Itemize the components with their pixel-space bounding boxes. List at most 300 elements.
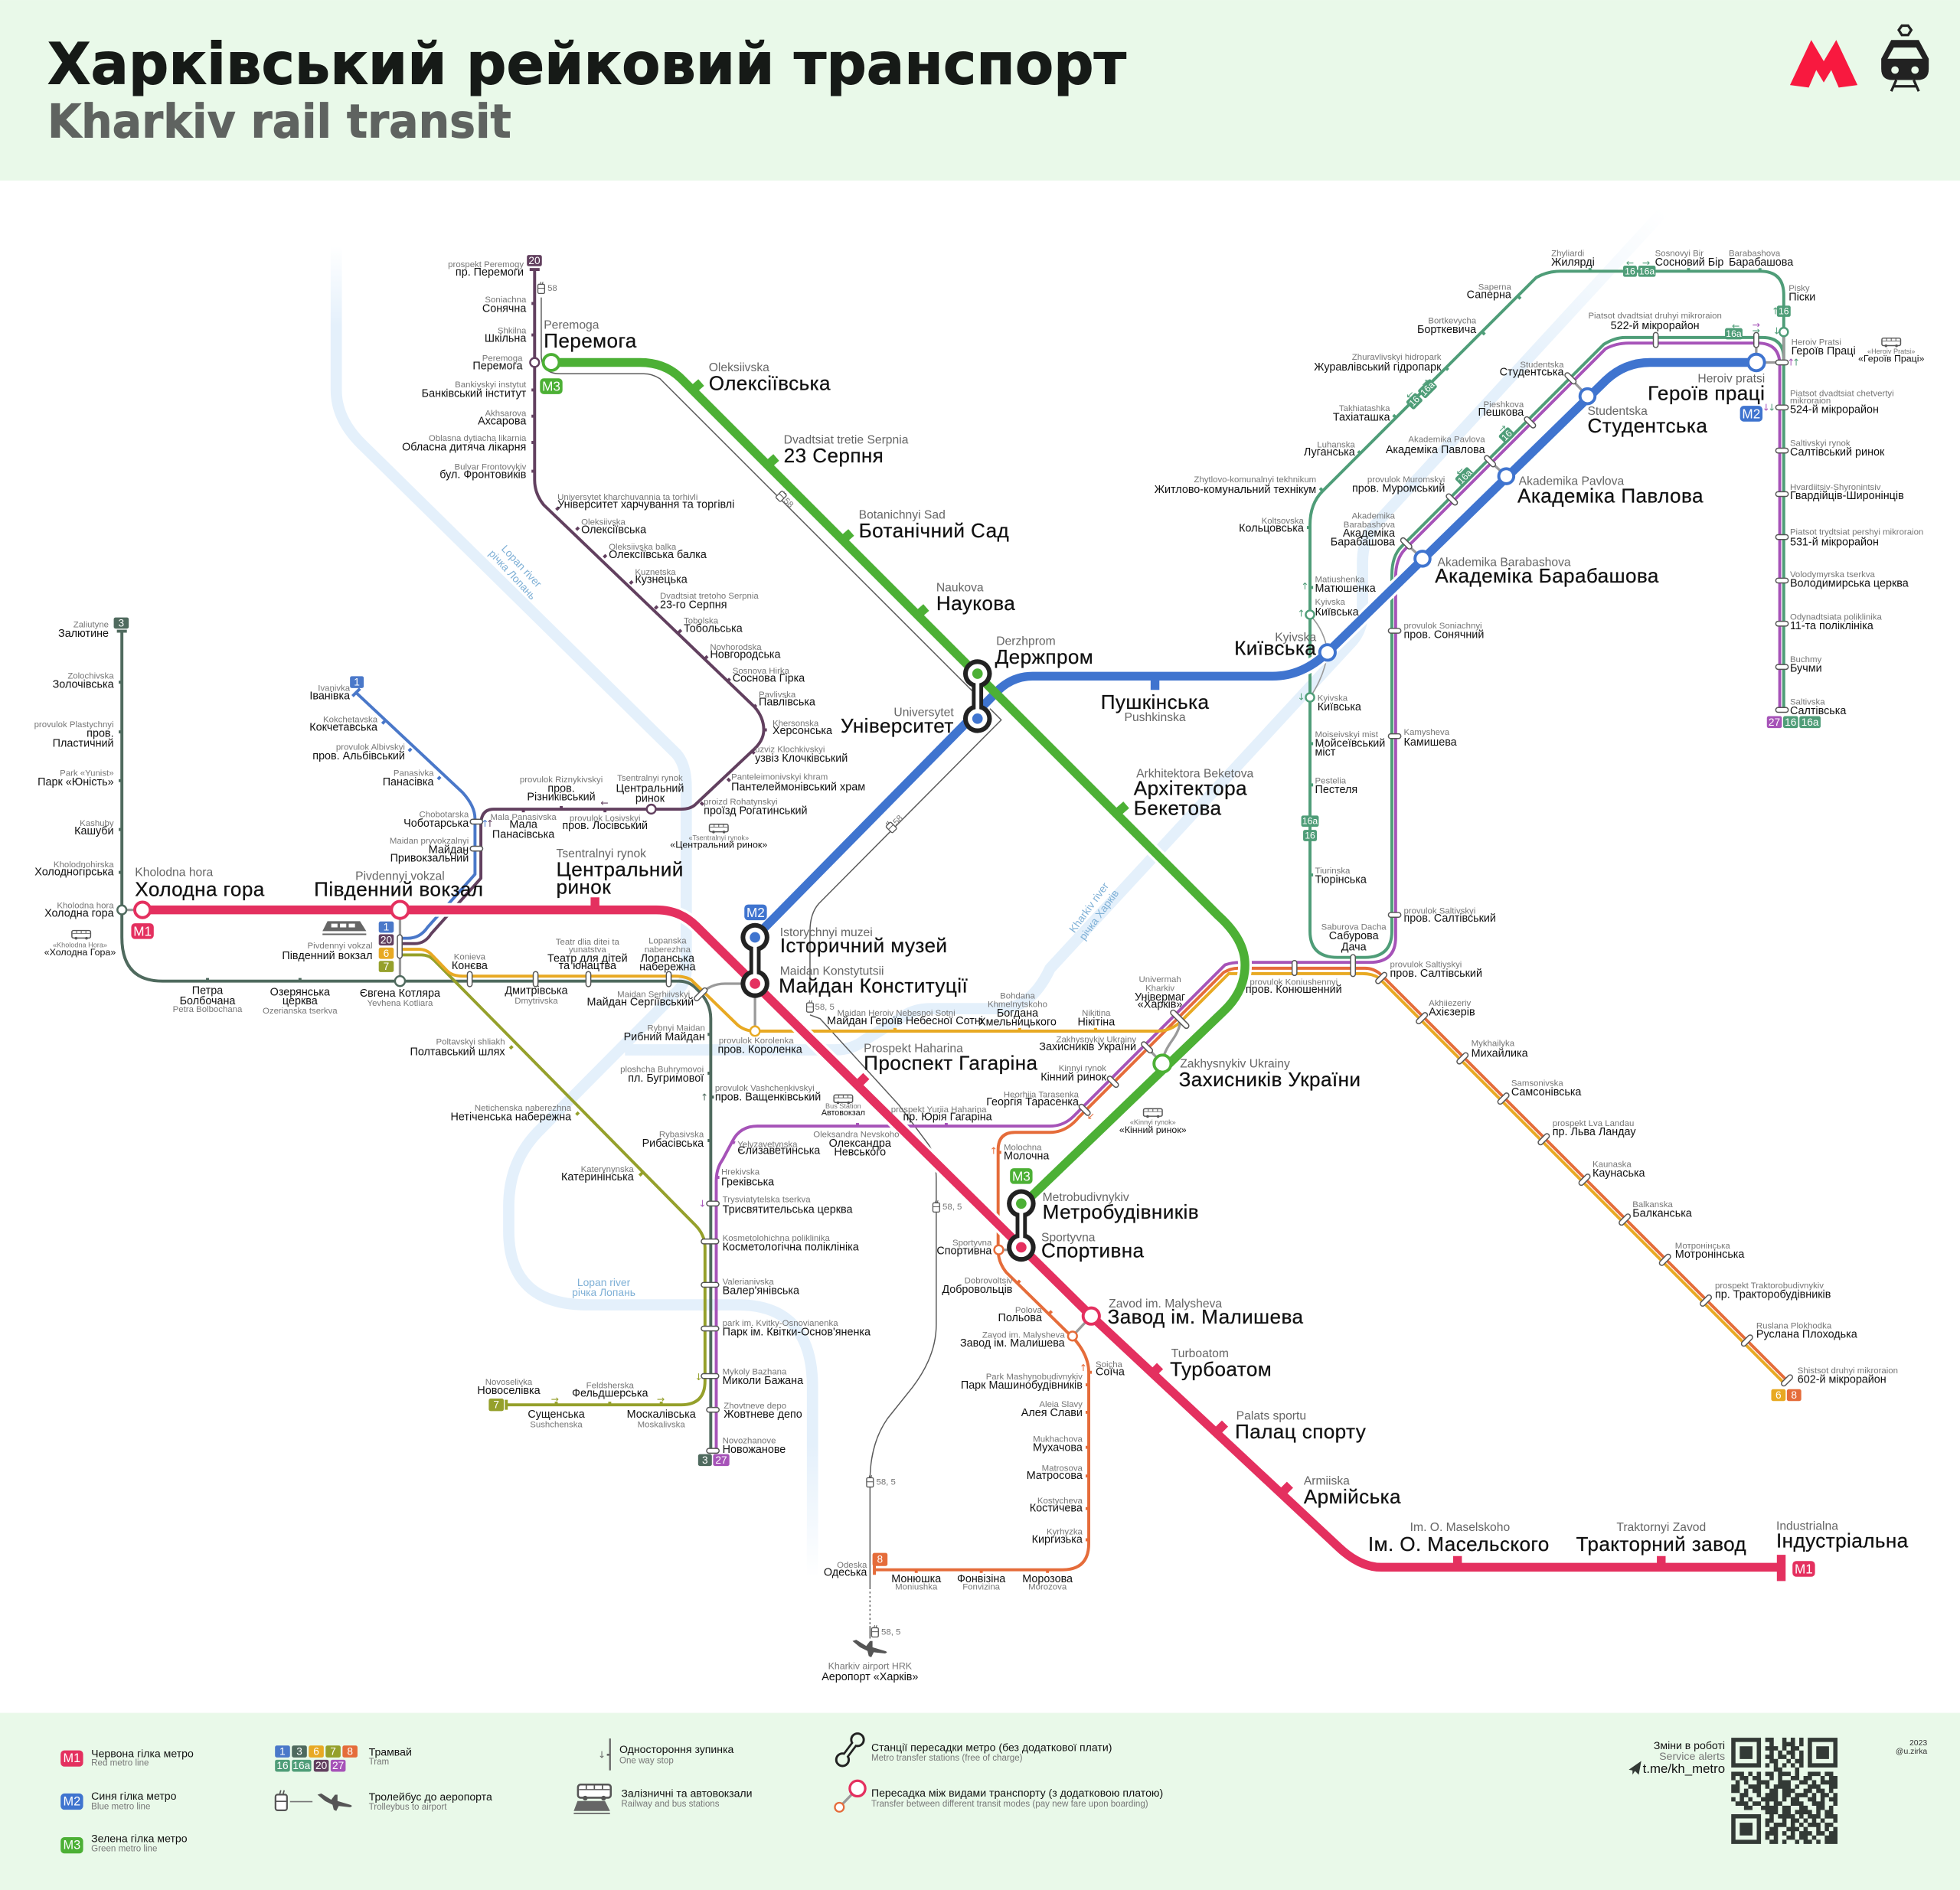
arrows: purple: ↑ xyxy=(1787,357,1795,368)
tram stop labels: east lines 6 and 8: Mykhailyka xyxy=(1472,1039,1515,1048)
icon: metro logo xyxy=(1790,40,1857,87)
metro line M3 green xyxy=(551,363,1245,1206)
legend: transit mode transfer: Пересадка між видами транспорту (з додатковою платою) xyxy=(871,1787,1163,1799)
tram stop labels: line 3: Євгена Котляра xyxy=(360,987,440,1000)
badge 8 south: 8 xyxy=(877,1554,884,1565)
tram stop labels: line 8 south xyxy=(824,1143,1125,1592)
tram stop labels: line 27 south: пр. Юрія Гагаріна xyxy=(903,1111,992,1124)
tram stop labels: line 1: Panasivka xyxy=(394,769,434,779)
station: Олексіївська xyxy=(709,361,831,394)
tram stop labels: line 16a and 27: Studentska xyxy=(1520,361,1564,370)
station: Олексіївська: Oleksiivska xyxy=(709,361,769,374)
tram stop labels: line 1: Ivanivka xyxy=(318,684,351,694)
legend: tram badges xyxy=(275,1745,412,1771)
arrows: west: ↓ xyxy=(695,1372,703,1382)
tram stop labels: line 3: Zolochivska xyxy=(67,671,114,681)
station: Університет: Universytet xyxy=(893,707,954,720)
tram stop labels: line 20: Пантелеймонівський храм xyxy=(731,782,865,794)
legend: tram badges: 20 xyxy=(315,1760,328,1771)
icon: trolleybus 58,5 xyxy=(807,1000,835,1012)
badge 3: 3 xyxy=(119,617,125,628)
tram stop labels: line 16: Жилярді xyxy=(1551,256,1595,269)
tram stop labels: east lines 6 and 8: пров. Салтівський xyxy=(1390,968,1482,980)
badges diagonal inner: 16 xyxy=(1499,428,1514,443)
tram stop labels: line 16a and 27: Pieshkova xyxy=(1484,400,1524,410)
tram stop labels: line 6: Nikitina xyxy=(1082,1009,1111,1018)
capsules: south vertical xyxy=(701,1201,719,1453)
arrows: green: ↑ xyxy=(1297,609,1305,619)
station: Академіка Барабашова: Академіка Барабашова xyxy=(1435,564,1659,587)
tram stop labels: line 3: Petra Bolbochana xyxy=(173,1005,243,1014)
tram stop labels: line 8 south: Molochna xyxy=(1004,1143,1042,1152)
tram stop labels: line 16a and 27: Barabashova xyxy=(1344,521,1396,530)
station: Холодна гора xyxy=(135,867,265,901)
station: Турбоатом: Турбоатом xyxy=(1170,1358,1272,1381)
tram stop labels: line 16a and 27: Piatsot trydtsiat pershyi mikroraion xyxy=(1790,528,1923,537)
QR code xyxy=(1731,1738,1838,1844)
tram stop labels: line 3: Залютине xyxy=(58,628,109,640)
tram stop labels: line 16: Матюшенка xyxy=(1315,583,1376,595)
tram stop labels: line 8 south: Aleia Slavy xyxy=(1039,1400,1083,1409)
arrows: green xyxy=(1297,258,1800,703)
tram stop labels: line 20: Сонячна xyxy=(482,302,526,315)
tram stop labels: line 16 xyxy=(1155,249,1815,954)
tram stop labels: line 3: provulok Vashchenkivskyi xyxy=(715,1084,815,1093)
station: Захисників України: Zakhysnykiv Ukrainy xyxy=(1180,1057,1290,1070)
tram stop labels: line 16: Тахіаташка xyxy=(1333,411,1390,423)
arrows: green: ↓ xyxy=(1773,326,1781,337)
tram stop labels: line 7: Новоселівка xyxy=(477,1385,541,1397)
legend: tram badges: 16a xyxy=(292,1760,311,1771)
tram stop labels: line 16a and 27: Гвардійців-Широнінців xyxy=(1790,490,1904,502)
tram stop labels: line 3: Kholodna hora xyxy=(57,902,114,911)
legend: railway and bus stations: Залізничні та автовокзали xyxy=(621,1787,753,1799)
tram stop labels: line 16: Саперна xyxy=(1467,289,1511,301)
tram stop labels: line 20: Соснова Гірка xyxy=(733,673,805,685)
tram stop labels: line 16a and 27: Heroiv Pratsi xyxy=(1792,338,1841,347)
tram stop labels: east lines 6 and 8: Shistsot druhyi mikroraion xyxy=(1798,1366,1898,1376)
arrows: west: ↑ xyxy=(486,818,494,829)
arrows: green: ← xyxy=(1732,321,1740,331)
metro lines xyxy=(142,363,1782,1581)
tram stop labels: line 20: Oblasna dytiacha likarnia xyxy=(429,434,527,443)
tram stop labels: line 7: Netichenska naberezhna xyxy=(475,1104,572,1113)
tram stop labels: line 16a and 27: provulok Saltivskyi xyxy=(1403,906,1475,916)
legend: M2: Синя гілка метро xyxy=(91,1790,177,1802)
tram stop labels: line 7: Нетіченська набережна xyxy=(451,1111,571,1124)
airport xyxy=(822,1640,918,1683)
tram stop labels: east lines 6 and 8: Михайлика xyxy=(1472,1047,1528,1059)
tram stop labels: line 8 south: Matrosova xyxy=(1042,1464,1083,1473)
badges 27 16 16a terminus: 27 xyxy=(1769,717,1780,728)
tram stop labels: line 7: Poltavskyi shliakh xyxy=(436,1038,505,1047)
tram stop labels: east lines 6 and 8: Samsonivska xyxy=(1511,1079,1563,1089)
bus station Автовокзал: Bus Station xyxy=(825,1102,861,1110)
tram stop labels: line 20: Bulvar Frontovykiv xyxy=(455,463,527,472)
tram stop labels: line 20: Олексіївська xyxy=(581,524,646,536)
metro line M2 blue xyxy=(755,363,1756,938)
tram stop labels: line 1: Pivdennyi vokzal xyxy=(308,942,373,951)
tram stop labels: line 8 south: Фонвізіна xyxy=(957,1573,1005,1585)
tram stop labels: line 27 south: Універмаг xyxy=(1135,991,1185,1004)
interchange connectors xyxy=(121,331,1784,1336)
tram stop labels: east lines 6 and 8: Ruslana Plokhodka xyxy=(1756,1321,1832,1330)
tram stop labels: line 20: Khersonska xyxy=(773,719,819,728)
tram stop labels: line 3: Yevhena Kotliara xyxy=(368,999,433,1008)
tram stop labels: east lines 6 and 8: Balkanska xyxy=(1632,1200,1674,1209)
station: Ботанічний Сад: Botanichnyi Sad xyxy=(859,509,946,522)
tram stop labels: line 27 south: Zakhysnykiv Ukrainy xyxy=(1056,1035,1136,1044)
tram stop labels: line 8 south: Киргизька xyxy=(1032,1533,1083,1546)
transfer: M1 xyxy=(135,902,1099,1324)
station: Армійська xyxy=(1304,1475,1401,1508)
tram stop labels: line 3: Петра xyxy=(192,985,223,997)
tram stop labels: line 7: Katerynynska xyxy=(581,1165,634,1174)
badge 8 south xyxy=(873,1553,887,1566)
tram stop labels: line 16: Saburova Dacha xyxy=(1321,922,1387,932)
tram stop labels: line 16a and 27: provulok Soniachnyi xyxy=(1403,622,1482,631)
tram stop labels: line 27 south: Миколи Бажана xyxy=(723,1375,803,1387)
tram stop labels: line 16a and 27: Салтівський ринок xyxy=(1790,446,1885,459)
tram stop labels: line 3: Kholodnohirska xyxy=(54,860,114,870)
tram line 8 xyxy=(874,968,1788,1575)
tram stop labels: line 6: Конєва xyxy=(452,960,488,972)
bus station Кінний ринок: «Кінний ринок» xyxy=(1119,1125,1187,1135)
icon: trolleybus 58,5 airport: 58, 5 xyxy=(881,1627,900,1637)
station: Пушкінська: Pushkinska xyxy=(1125,711,1186,724)
badges 6 and 8 east xyxy=(1771,1389,1802,1401)
station: Олексіївська: Олексіївська xyxy=(709,371,831,394)
icon: trolleybus 58,5 airport xyxy=(871,1625,900,1637)
station: Академіка Павлова: Akademika Pavlova xyxy=(1519,475,1624,488)
tram stop labels: line 20: узвіз Клочківський xyxy=(755,752,848,765)
bus station Героїв Праці xyxy=(1858,338,1924,364)
airport label xyxy=(822,1660,918,1683)
tram stop labels: line 16a and 27: Akademika Pavlova xyxy=(1408,436,1485,445)
tram stop labels: line 16a and 27: Пешкова xyxy=(1478,406,1524,419)
station: Архітектора Бекетова: Архітектора xyxy=(1134,776,1247,799)
tram stop labels: line 27 south: Єлизаветинська xyxy=(737,1145,820,1157)
badge M1 east: M1 xyxy=(1795,1562,1813,1577)
tram stop labels: line 20: Олексіївська балка xyxy=(609,549,707,561)
tram stop labels: line 8 south: Одеська xyxy=(824,1567,867,1579)
bus station Центральний ринок: «Tsentralnyi rynok» xyxy=(688,834,749,842)
tram line 3 xyxy=(117,632,714,1450)
icon: trolleybus 58 north xyxy=(538,282,557,293)
credits: @u.zirka xyxy=(1896,1748,1927,1756)
tram line 7 xyxy=(403,955,705,1410)
tram line 1 xyxy=(352,689,475,938)
badges 16 16a top: 16a xyxy=(1639,266,1655,276)
legend: trolleybus to airport: Trolleybus to airport xyxy=(369,1803,447,1812)
tram stop labels: east lines 6 and 8: пров. Конюшенний xyxy=(1246,984,1342,996)
arrows: orange: ↑ xyxy=(990,1146,998,1157)
legend: tram badges: 27 xyxy=(332,1760,344,1771)
tram stop labels: line 1: Kokchetavska xyxy=(323,715,378,724)
capsules: right column xyxy=(1654,332,1788,712)
tram stop labels: line 16: Moiseivskyi mist xyxy=(1315,730,1379,739)
station: Київська: Kyivska xyxy=(1275,632,1316,645)
tram stop labels: line 16: Пестеля xyxy=(1315,784,1357,796)
tram stop labels: line 27 south: park im. Kvitky-Osnovianenka xyxy=(723,1319,838,1328)
legend: M1: Червона гілка метро xyxy=(91,1748,194,1760)
station: Центральний ринок: Tsentralnyi rynok xyxy=(557,847,646,860)
arrows: green: ↓ xyxy=(1768,402,1775,413)
tram stop labels: line 16: Kyivska xyxy=(1318,694,1348,703)
tram stop labels: east lines 6 and 8: Каунаська xyxy=(1592,1167,1645,1180)
tram stop labels: line 7: Moskalivska xyxy=(638,1420,685,1429)
arrows: green: ↙ xyxy=(1406,389,1414,400)
tram stop labels: line 7: Полтавський шлях xyxy=(410,1046,505,1059)
tram stop labels: line 8 south: Алея Слави xyxy=(1021,1407,1083,1419)
tram stop labels: line 16: Луганська xyxy=(1304,446,1355,459)
tram stop labels: line 27 south: Валер'янівська xyxy=(723,1285,799,1298)
tram stop labels: line 1: Південний вокзал xyxy=(282,950,373,962)
tram stop labels: line 6: Лопанська xyxy=(641,952,694,965)
tram stop labels: line 16: Barabashova xyxy=(1729,249,1781,258)
tram stop labels: line 16a and 27: 522-й мікрорайон xyxy=(1611,320,1700,332)
bus and railway stations xyxy=(44,338,1924,1135)
interchange: Kyivska arcs xyxy=(1310,615,1328,697)
tram stop labels: line 20: Кузнецька xyxy=(635,574,688,586)
bus station Героїв Праці: «Героїв Праці» xyxy=(1858,354,1924,364)
tram stop labels: line 3 xyxy=(34,620,821,1150)
capsules: east diagonal xyxy=(1375,971,1794,1387)
tram stop labels: line 20: Dvadtsiat tretoho Serpnia xyxy=(660,592,759,601)
tram stop labels: line 16: Saperna xyxy=(1478,283,1512,292)
station: Студентська: Студентська xyxy=(1587,414,1707,437)
tram stop labels: line 1: Chobotarska xyxy=(420,811,469,820)
tram stop labels: line 27 south: Жовтневе депо xyxy=(724,1409,802,1421)
service alerts: Service alerts xyxy=(1659,1751,1725,1763)
tram stop labels: line 16a and 27: пров. Салтівський xyxy=(1403,912,1496,925)
legend: one way stop: ↓ xyxy=(598,1749,606,1760)
icon: trolleybus 58 north: 58 xyxy=(547,284,557,293)
tram stop labels: line 1: пров. Альбівський xyxy=(312,750,405,762)
tram stop labels: line 20: проїзд Рогатинський xyxy=(704,805,808,818)
tram stop labels: line 16a and 27: Бучми xyxy=(1790,663,1822,675)
tram stop labels: line 3: Озерянська xyxy=(270,986,330,998)
tram line 20 xyxy=(400,269,767,944)
tram stop labels: line 16a and 27: Odynadtsiata poliklinika xyxy=(1790,613,1882,622)
legend: M3 xyxy=(60,1833,188,1854)
tram stop labels: line 20: Tobolska xyxy=(684,616,719,625)
station: Наукова xyxy=(936,581,1015,615)
tram stop labels: line 16a and 27: Камишева xyxy=(1403,736,1457,749)
tram stop labels: line 16a and 27: Академіка xyxy=(1343,527,1395,540)
station: Завод ім. Малишева: Завод ім. Малишева xyxy=(1108,1305,1303,1328)
bus station Кінний ринок: «Kinnyi rynok» xyxy=(1130,1118,1176,1126)
tram stop labels: line 20: Universytet kharchuvannia ta torhivli xyxy=(557,493,697,502)
tram stop labels: line 3: Park «Yunist» xyxy=(60,769,114,779)
station: Держпром: Derzhprom xyxy=(996,635,1056,648)
tram stop labels: line 3: Дмитрівська xyxy=(505,985,567,997)
legend: tram badges: 8 xyxy=(347,1746,353,1758)
tram stop labels: line 20: Oleksiivska xyxy=(581,517,626,527)
badges diagonal inner: 16a xyxy=(1455,468,1475,486)
tram stop labels: line 27 south: Захисників України xyxy=(1039,1041,1136,1053)
tram stop labels: line 8 south: Монюшка xyxy=(891,1573,941,1585)
tram stop labels: line 20: Університет харчування та торгівлі xyxy=(557,499,734,511)
tram stop labels: line 6: Театр для дітей xyxy=(547,952,628,965)
title: Харківський рейковий транспорт xyxy=(47,30,1126,97)
tram stop labels: east lines 6 and 8: provulok Saltiyskyi xyxy=(1390,960,1462,969)
badges 16 16a top: 16 xyxy=(1625,266,1635,276)
river label: Lopan upper: Lopan river xyxy=(499,543,544,590)
tram stop labels: line 7: Катеринінська xyxy=(561,1171,634,1183)
river label: Lopan upper: річка Лопань xyxy=(486,547,539,602)
tram stop labels: east lines 6 and 8: prospekt Lva Landau xyxy=(1553,1119,1634,1128)
tram stop labels: line 6: Хмельницького xyxy=(978,1017,1057,1029)
tram stop labels: line 3: церква xyxy=(283,995,318,1007)
tram stop labels: line 20: Tsentralnyi rynok xyxy=(617,774,683,783)
arrows: orange xyxy=(990,1111,1095,1373)
tram stop labels: east lines 6 and 8: provulok Koniushennyi xyxy=(1250,978,1338,987)
legend: M3: Green metro line xyxy=(91,1845,157,1854)
icon: trolleybus 58,5 south: 58, 5 xyxy=(876,1477,896,1487)
badge M3 south: M3 xyxy=(1012,1168,1031,1183)
arrows: west: ← xyxy=(600,798,609,808)
tram stop labels: line 8 south: Park Mashynobudivnykiv xyxy=(986,1373,1083,1382)
tram lines xyxy=(117,268,1788,1575)
station: Центральний ринок xyxy=(557,847,684,898)
tram stop labels: line 3: Болбочана xyxy=(180,995,235,1007)
legend: M2 xyxy=(60,1790,177,1811)
tram stop labels: line 7: Feldsherska xyxy=(586,1382,634,1391)
badge 20 north: 20 xyxy=(528,255,541,266)
tram stop labels: line 20: Kuznetska xyxy=(635,568,676,577)
tram stop labels: line 6: пров. Короленка xyxy=(718,1043,802,1056)
icon: trolleybus 58 south-west: 58 xyxy=(891,814,905,827)
station: Спортивна: Спортивна xyxy=(1041,1239,1145,1262)
tram stop labels: line 6: та юнацтва xyxy=(559,960,616,972)
metro line badges xyxy=(131,378,1815,1577)
tram stop labels: line 20: Mala Panasivska xyxy=(490,813,557,822)
tram stop labels: line 20: Мала xyxy=(509,819,537,831)
arrows: west: → xyxy=(657,1394,665,1405)
metro line M1 red xyxy=(142,897,1782,1581)
arrows: green: → xyxy=(1642,258,1650,269)
tram line 27 xyxy=(717,343,1780,1450)
rivers xyxy=(336,213,1662,1575)
arrows: west: ↑ xyxy=(481,818,489,829)
tram stop labels: line 6 xyxy=(452,936,1115,1056)
station: Пушкінська: Пушкінська xyxy=(1101,690,1209,713)
tram stop labels: line 20: Pavlivska xyxy=(759,690,796,700)
station: Перемога: Перемога xyxy=(544,329,637,352)
tram stop labels: line 16: Pestelia xyxy=(1315,776,1347,785)
station: Холодна гора: Холодна гора xyxy=(135,878,265,901)
station: Метробудівників: Metrobudivnykiv xyxy=(1043,1191,1129,1204)
tram stop labels: line 20: Тобольська xyxy=(684,622,743,635)
tram stop labels: line 27 south: Греківська xyxy=(721,1177,774,1189)
tram stop labels: line 20: 23-го Серпня xyxy=(660,599,727,611)
station: Держпром xyxy=(995,635,1093,668)
tram stop labels: line 6: Khmelnytskoho xyxy=(988,1000,1047,1010)
bus station Автовокзал: Автовокзал xyxy=(822,1108,865,1118)
bus station Героїв Праці: «Heroiv Pratsi» xyxy=(1867,348,1915,355)
legend: M2: M2 xyxy=(64,1795,80,1809)
tram stop labels: line 16a and 27: Volodymyrska tserkva xyxy=(1790,570,1876,579)
capsules: middle verticals xyxy=(1292,628,1401,977)
station: Ім. О. Масельского: Im. O. Maselskoho xyxy=(1410,1521,1510,1534)
tram stop labels: line 20: prospekt Peremogy xyxy=(448,260,524,269)
badges 16a 16 west: 16a xyxy=(1302,816,1318,827)
station: Майдан Конституції: Майдан Конституції xyxy=(779,974,968,997)
badges at Південний вокзал xyxy=(379,922,394,972)
legend: M3: M3 xyxy=(64,1839,80,1852)
badge M3 north: M3 xyxy=(542,379,560,394)
arrows: green: ↑ xyxy=(1301,581,1309,592)
station: Палац спорту: Палац спорту xyxy=(1235,1420,1366,1443)
badges 27 16 16a terminus: 16a xyxy=(1802,717,1819,728)
station: Проспект Гагаріна: Prospekt Haharina xyxy=(864,1043,963,1056)
tram stop labels: line 20: Панасівська xyxy=(492,829,554,841)
trolleybus line to airport xyxy=(538,282,1001,1638)
tram stop labels: line 3: Zaliutyne xyxy=(74,620,109,629)
station: Тракторний завод: Traktornyi Zavod xyxy=(1616,1521,1706,1534)
tram stop labels: line 16: Luhanska xyxy=(1317,440,1355,449)
arrows: purple: ↓ xyxy=(698,1198,707,1209)
transfer: M3 xyxy=(544,354,1171,1072)
tram stop labels: line 16a and 27: Akademika xyxy=(1352,511,1396,521)
tram stop labels: line 27 south: Кінний ринок xyxy=(1040,1071,1107,1083)
tram stop labels: line 8 south: Morozova xyxy=(1028,1583,1067,1592)
bus station Автовокзал xyxy=(822,1095,865,1118)
legend: M1 xyxy=(60,1748,194,1768)
tram stop labels: line 16a and 27 xyxy=(1331,312,1923,925)
tram stop labels: line 27 south: Невського xyxy=(834,1146,886,1158)
tram stop labels: line 16a and 27: Салтівська xyxy=(1790,705,1846,717)
river label: Lopan lower: річка Лопань xyxy=(572,1286,635,1298)
badges at Південний вокзал: 7 xyxy=(384,961,389,972)
legend: one way stop xyxy=(598,1738,734,1771)
tram stop labels: line 20: Peremoga xyxy=(482,354,523,364)
river label: Kharkiv: Kharkiv river xyxy=(1067,880,1111,935)
tram stop labels: line 20: Різниківський xyxy=(527,792,596,804)
station: Архітектора Бекетова: Бекетова xyxy=(1134,797,1221,820)
badges diagonal outer xyxy=(1406,379,1438,410)
legend: M2: Blue metro line xyxy=(91,1802,150,1811)
river label: Lopan lower: Lopan river xyxy=(577,1276,631,1288)
tram stop labels: line 6: yunatstva xyxy=(569,945,606,955)
capsules: north-east bundle xyxy=(1078,372,1577,1116)
tram stop labels: line 20: provulok Losivskyi xyxy=(570,814,640,823)
tram stop labels: line 20: Panteleimonivskyi khram xyxy=(731,773,828,782)
tram stop labels: line 3: Холодна гора xyxy=(44,908,114,920)
tram stop labels: line 20: Bankivskyi instytut xyxy=(455,380,527,390)
stop circles: line 3 xyxy=(117,906,405,986)
tram stop labels: line 1: Привокзальний xyxy=(390,853,469,865)
river label: Kharkiv: річка Харків xyxy=(1076,887,1121,942)
tram stop labels: line 16a and 27: Saltivskyi rynok xyxy=(1790,439,1851,449)
badge 1 north xyxy=(350,676,364,688)
tram stop labels: line 16: Zhuravlivskyi hidropark xyxy=(1352,353,1442,362)
legend: trolleybus to airport: Тролейбус до аеропорта xyxy=(369,1790,492,1803)
badges diagonal outer: 16 xyxy=(1407,393,1422,409)
arrows: orange: ↑ xyxy=(1080,1363,1087,1373)
one-way arrows xyxy=(481,258,1800,1405)
badge M2 east: M2 xyxy=(1742,406,1760,421)
station: Ботанічний Сад xyxy=(859,509,1009,542)
tram stop labels: line 16a and 27: Hvardiitsiv-Shyronintsiv xyxy=(1790,483,1881,492)
badge 3 xyxy=(114,617,129,628)
tram stop labels: line 8 south: Матросова xyxy=(1027,1470,1083,1482)
bus station Кінний ринок xyxy=(1119,1108,1187,1135)
tram stop labels: line 16a and 27: Buchmy xyxy=(1790,655,1821,664)
tram stop labels: line 3: Пластичний xyxy=(53,737,114,749)
tram stop labels: line 20: uzviz Klochkivskyi xyxy=(755,746,825,755)
